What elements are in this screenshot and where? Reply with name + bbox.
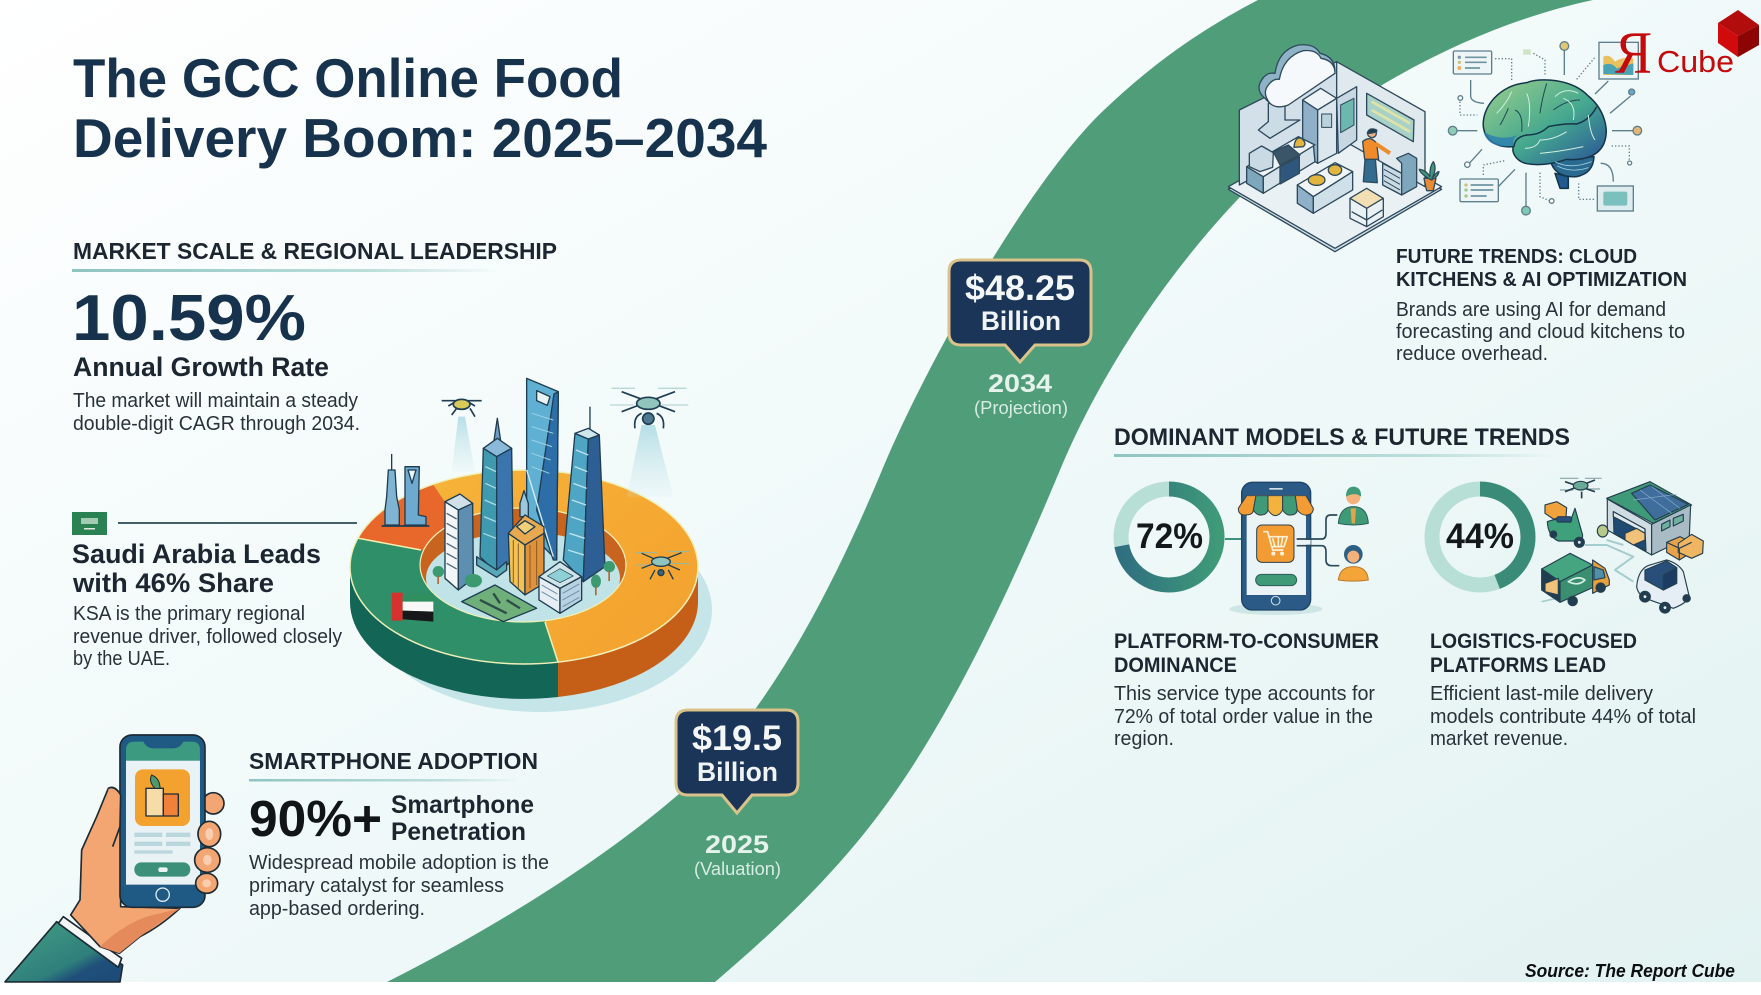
logo: R Cube: Я bbox=[1615, 20, 1652, 86]
stat: annual growth rate: 10.59% bbox=[72, 281, 306, 354]
stat: smartphone penetration bbox=[249, 790, 549, 920]
text: logistics-focused bbox=[1430, 629, 1696, 750]
callout: 2034 projection: (Projection) bbox=[974, 398, 1068, 418]
title bbox=[73, 47, 767, 169]
text: logistics-focused: models contribute 44% of total bbox=[1430, 706, 1696, 728]
stat: smartphone penetration: Widespread mobile adoption is the bbox=[249, 852, 549, 874]
text: future trends: reduce overhead. bbox=[1396, 343, 1548, 365]
logo: R Cube: Cube bbox=[1657, 44, 1734, 79]
callout: 2034 projection: 2034 bbox=[988, 370, 1052, 398]
stat: annual growth rate bbox=[72, 281, 360, 435]
text: platform-to-consumer: 72% of total order value in the bbox=[1114, 706, 1373, 728]
icon: logistics fleet and warehouse bbox=[1542, 478, 1703, 613]
icon: cube building bbox=[539, 562, 582, 613]
text: future trends: forecasting and cloud kitchens to bbox=[1396, 321, 1685, 343]
stat: smartphone penetration: 90%+ bbox=[249, 790, 382, 847]
icon: drone large bbox=[610, 388, 688, 428]
icon: parcels bbox=[1667, 534, 1703, 560]
text: Saudi Arabia share: by the UAE. bbox=[73, 648, 170, 670]
text: future trends bbox=[1396, 245, 1687, 365]
stat: smartphone penetration: primary catalyst for seamless bbox=[249, 875, 504, 897]
donut chart: 44% bbox=[1432, 489, 1528, 585]
text: logistics-focused: market revenue. bbox=[1430, 728, 1568, 750]
text: logistics-focused: PLATFORMS LEAD bbox=[1430, 653, 1606, 677]
text: platform-to-consumer bbox=[1114, 629, 1379, 750]
donut chart: 72%: 72% bbox=[1136, 517, 1203, 556]
section heading: smartphone adoption: SMARTPHONE ADOPTION bbox=[249, 748, 538, 774]
icon: right tower bbox=[563, 407, 605, 582]
icon: drone small bbox=[442, 399, 482, 417]
text: future trends: KITCHENS & AI OPTIMIZATION bbox=[1396, 268, 1687, 291]
icon: data panels bbox=[1453, 42, 1638, 211]
icon: drone beams bbox=[452, 417, 673, 497]
icon: UAE flag bbox=[392, 593, 433, 622]
stat: annual growth rate: double-digit CAGR through 2034. bbox=[73, 413, 360, 435]
icon: brain bbox=[1483, 80, 1606, 188]
section heading: market scale: MARKET SCALE & REGIONAL LEADERSHIP bbox=[73, 238, 557, 264]
section heading: dominant models: DOMINANT MODELS & FUTURE TRENDS bbox=[1114, 424, 1570, 451]
icon: left tower bbox=[477, 418, 513, 577]
icon: storefront phone and customers bbox=[1225, 482, 1368, 615]
stat: smartphone penetration: app-based ordering. bbox=[249, 898, 425, 920]
text: Saudi Arabia share: revenue driver, followed closely bbox=[73, 626, 342, 648]
text: platform-to-consumer: This service type accounts for bbox=[1114, 683, 1375, 705]
text: future trends: Brands are using AI for demand bbox=[1396, 299, 1666, 321]
growth ribbon bbox=[387, 0, 1593, 982]
icon: connector lines bbox=[1457, 51, 1633, 207]
icon: delivery robot bbox=[1637, 560, 1690, 613]
icon: AI brain network bbox=[1448, 42, 1642, 215]
text: logistics-focused: LOGISTICS-FOCUSED bbox=[1430, 629, 1637, 653]
stat: smartphone penetration: Smartphone bbox=[391, 791, 534, 819]
icon: nodes bbox=[1448, 42, 1642, 215]
text: platform-to-consumer: region. bbox=[1114, 728, 1174, 750]
icon: hand holding smartphone bbox=[5, 735, 224, 982]
icon: main tower bbox=[527, 378, 558, 560]
text: Saudi Arabia share: KSA is the primary regional bbox=[73, 603, 305, 625]
source note: Source: The Report Cube bbox=[1525, 961, 1735, 981]
callout: 2034 projection: Billion bbox=[981, 306, 1061, 336]
stat: annual growth rate: Annual Growth Rate bbox=[73, 352, 329, 382]
icon: central spire bbox=[520, 491, 528, 517]
icon: small skyline bbox=[382, 454, 429, 526]
text: Saudi Arabia share bbox=[72, 539, 342, 670]
donut chart: 44%: 44% bbox=[1446, 517, 1514, 556]
icon: scooter bbox=[1545, 502, 1584, 547]
text: Saudi Arabia share: with 46% Share bbox=[72, 568, 274, 598]
text: platform-to-consumer: PLATFORM-TO-CONSUMER bbox=[1114, 629, 1379, 653]
icon: gold building bbox=[508, 515, 544, 595]
stat: smartphone penetration: Penetration bbox=[391, 818, 526, 846]
callout: 2025 valuation: (Valuation) bbox=[694, 859, 781, 879]
logo: R Cube bbox=[1615, 10, 1759, 86]
icon: white building bbox=[445, 494, 473, 590]
text: logistics-focused: Efficient last-mile delivery bbox=[1430, 683, 1653, 705]
callout: 2025 valuation: Billion bbox=[697, 757, 778, 787]
text: platform-to-consumer: DOMINANCE bbox=[1114, 653, 1237, 677]
chart: 3D regional share ring with city bbox=[349, 378, 712, 712]
callout: 2025 valuation: 2025 bbox=[705, 831, 769, 859]
donut chart: 72% bbox=[1121, 489, 1217, 585]
title: Delivery Boom: 2025–2034 bbox=[73, 107, 767, 169]
callout: 2034 projection: $48.25 bbox=[965, 269, 1075, 308]
icon: drone on ring bbox=[635, 552, 690, 579]
icon: delivery truck bbox=[1542, 553, 1609, 606]
callout: 2025 valuation: $19.5 bbox=[692, 719, 782, 758]
icon: park bbox=[462, 585, 537, 622]
callout: 2025 valuation bbox=[676, 710, 798, 879]
stat: annual growth rate: The market will maintain a steady bbox=[73, 390, 358, 412]
icon: cloud kitchen bbox=[1228, 45, 1442, 252]
icon: drone bbox=[1560, 478, 1602, 498]
text: Saudi Arabia share: Saudi Arabia Leads bbox=[72, 539, 321, 569]
title: The GCC Online Food bbox=[73, 47, 623, 109]
icon: trees bbox=[433, 561, 615, 595]
text: future trends: FUTURE TRENDS: CLOUD bbox=[1396, 245, 1637, 268]
icon: warehouse bbox=[1597, 482, 1692, 555]
callout: 2034 projection bbox=[949, 260, 1091, 418]
icon: Saudi flag with leader line bbox=[72, 512, 357, 535]
